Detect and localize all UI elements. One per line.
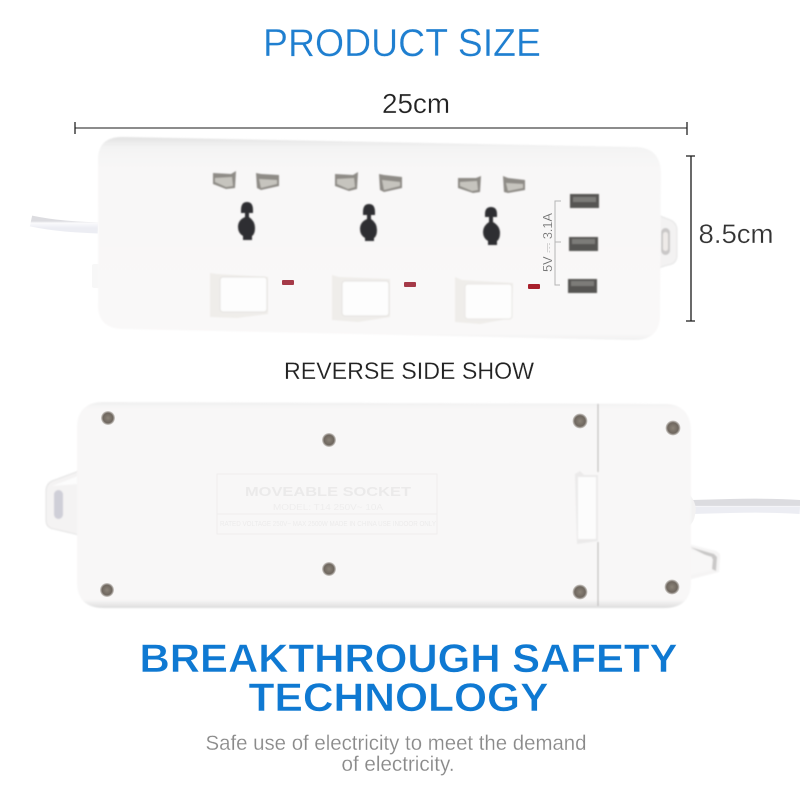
description text: of electricity. [342,753,454,776]
screw: lower centre [322,562,336,576]
height dimension: 8.5cm: 8.5cm [698,219,774,249]
width dimension: 25cm: 25cm [382,88,450,119]
power strip: reverse view [46,402,800,608]
product label: MOVEABLE SOCKET [245,484,411,499]
socket 2 [335,172,402,241]
subheading: reverse side show: REVERSE SIDE SHOW [284,358,534,385]
switch 1 [210,273,268,318]
screw: door bottom [572,584,588,600]
screw: door top [572,414,588,428]
indicator light 3 [528,284,540,289]
headline: breakthrough safety technology: TECHNOLOGY [248,676,549,720]
strip body: reverse [77,402,691,608]
strip body [98,137,661,340]
description text: Safe use of electricity to meet the demand [206,732,586,755]
side button [92,264,100,288]
usb output label: 5V ⎓ 3.1A [540,213,555,272]
mounting tab: reverse right [688,544,720,580]
screw: upper centre [322,433,336,447]
mounting tab: reverse left [46,471,79,535]
power cable: reverse [692,506,800,507]
screw: end bottom [664,580,680,594]
mounting tab: front right [655,214,677,269]
product label: RATED VOLTAGE 250V~ MAX 2500W MADE IN CHINA USE INDOOR ONLY [220,521,436,528]
usb output label [540,201,561,285]
product label: MODEL: T14 250V~ 10A [273,503,384,512]
screw: top left [101,411,115,425]
indicator light 1 [282,280,294,285]
title: product size: PRODUCT SIZE [263,22,541,65]
switch 3 [455,277,513,324]
description text [206,732,586,776]
headline: breakthrough safety technology: BREAKTHROUGH SAFETY [140,637,678,681]
headline: breakthrough safety technology [140,637,678,720]
usb port 2 [569,237,598,251]
screw: end top [666,420,680,436]
power cable: front [31,221,98,228]
power strip: front view [31,137,677,340]
screw: bottom left [100,583,114,597]
usb port 1 [570,194,599,208]
usb port 3 [568,279,597,293]
indicator light 2 [404,282,416,287]
product label [217,474,437,534]
socket 3 [458,176,525,245]
socket 1 [213,171,279,240]
switch 2 [332,275,390,322]
battery door seam and latch [575,404,598,606]
